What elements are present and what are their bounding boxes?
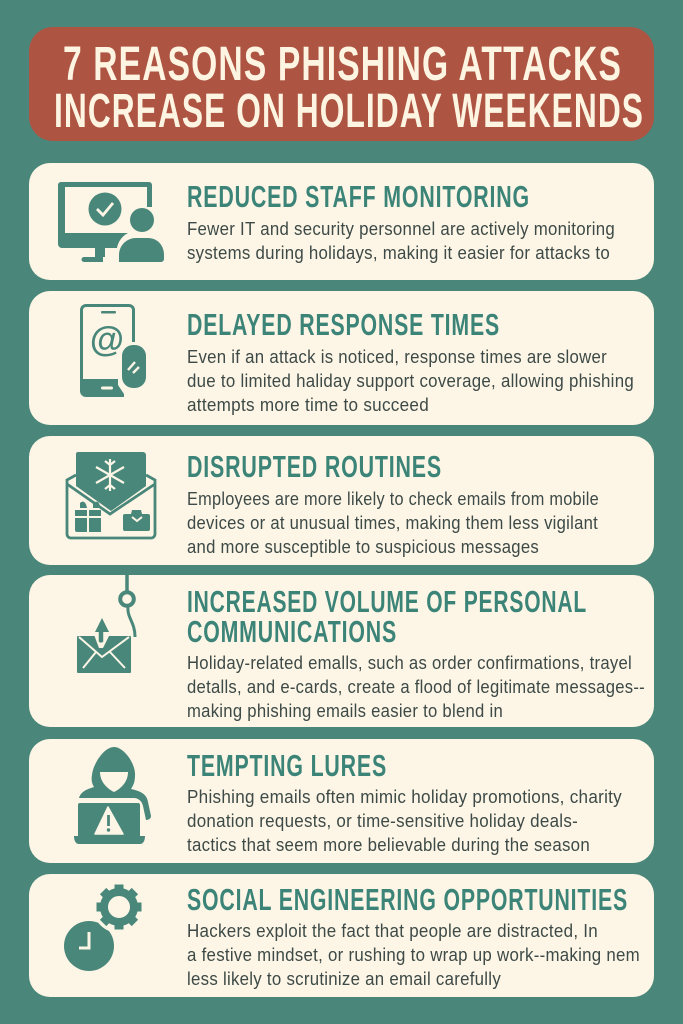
body text bbox=[187, 488, 599, 557]
icon: clock and gear bbox=[64, 881, 145, 971]
body text: a festive mindset, or rushing to wrap up work--making nem bbox=[187, 944, 640, 965]
body text bbox=[187, 218, 615, 263]
panel: tempting lures bbox=[29, 739, 654, 863]
body text: donation requests, or time-sensitive holiday deals- bbox=[187, 810, 578, 831]
icon: envelope with snowflake card bbox=[67, 452, 155, 538]
heading: TEMPTING LURES bbox=[187, 748, 387, 783]
body text: Employees are more likely to check emails from mobile bbox=[187, 488, 599, 509]
body text: due to limited haliday support coverage, allowing phishing bbox=[187, 370, 634, 391]
panel: social engineering opportunities bbox=[29, 874, 654, 997]
heading: DELAYED RESPONSE TIMES bbox=[187, 307, 500, 342]
title banner bbox=[29, 27, 654, 141]
body text bbox=[187, 346, 634, 415]
body text: Holiday-related emalls, such as order confirmations, trayel bbox=[187, 652, 632, 673]
body text: devices or at unusual times, making them less vigilant bbox=[187, 512, 598, 533]
icon: hook and envelope bbox=[77, 575, 135, 673]
icon: monitor with check and person bbox=[58, 182, 164, 262]
body text bbox=[187, 652, 645, 721]
panel: disrupted routines bbox=[29, 436, 654, 565]
body text: making phishing emails easier to blend in bbox=[187, 700, 503, 721]
panel: delayed response times bbox=[29, 291, 654, 425]
body text: Phishing emails often mimic holiday promotions, charity bbox=[187, 786, 622, 807]
icon: phone with at sign: @ bbox=[90, 320, 124, 359]
heading: DISRUPTED ROUTINES bbox=[187, 449, 442, 484]
body text bbox=[187, 920, 640, 989]
icon: hooded hacker with laptop bbox=[74, 747, 151, 844]
body text: and more susceptible to suspicious messages bbox=[187, 536, 539, 557]
body text: Fewer IT and security personnel are actively monitoring bbox=[187, 218, 615, 239]
body text: Hackers exploit the fact that people are distracted, In bbox=[187, 920, 598, 941]
heading bbox=[187, 584, 587, 649]
body text bbox=[187, 786, 622, 855]
body text: less likely to scrutinize an email carefully bbox=[187, 968, 501, 989]
body text: attempts more time to succeed bbox=[187, 394, 429, 415]
body text: detalls, and e-cards, create a flood of legitimate messages-- bbox=[187, 676, 645, 697]
panel: reduced staff monitoring bbox=[29, 163, 654, 280]
body text: systems during holidays, making it easier for attacks to bbox=[187, 242, 610, 263]
heading: REDUCED STAFF MONITORING bbox=[187, 179, 530, 214]
heading: COMMUNICATIONS bbox=[187, 614, 397, 649]
icon: phone with at sign bbox=[80, 304, 149, 397]
panel: increased volume of personal communications bbox=[29, 575, 654, 727]
body text: tactics that seem more believable during the season bbox=[187, 834, 590, 855]
body text: Even if an attack is noticed, response times are slower bbox=[187, 346, 607, 367]
